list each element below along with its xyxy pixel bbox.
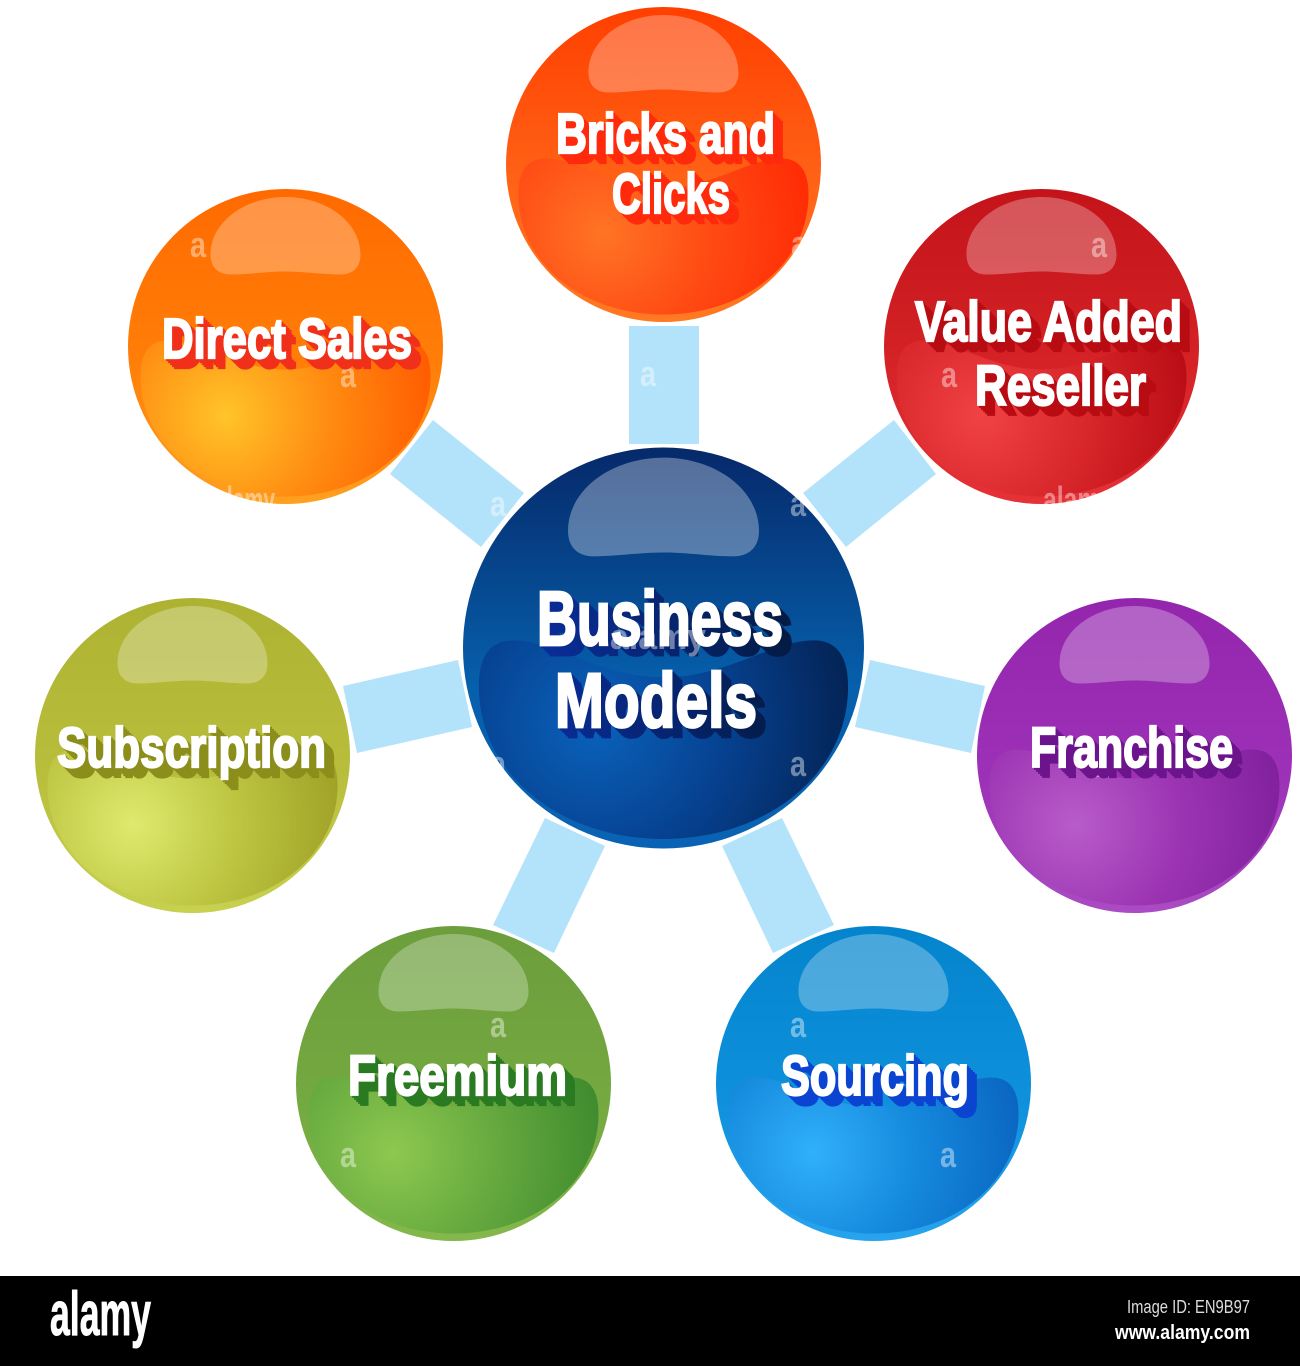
bubble: Freemium: Freemium [348, 1044, 567, 1108]
bubble: Franchise [974, 595, 1295, 916]
central bubble: Business Models: Business [537, 576, 783, 662]
bubble: Direct Sales: Direct Sales [162, 307, 412, 371]
bubble: Direct Sales: alamy [215, 479, 275, 520]
bubble: Freemium: a [490, 1004, 507, 1045]
bubble: Value Added Reseller: Value Added [915, 290, 1182, 354]
central bubble: Business Models: a [790, 483, 807, 524]
bubble: Value Added Reseller: Reseller [975, 354, 1146, 418]
watermark on connectors: a [640, 353, 657, 394]
bubble: Sourcing: Sourcing [781, 1044, 969, 1108]
bubble: Direct Sales: a [340, 354, 357, 395]
connector: right [855, 660, 985, 753]
bubble: Subscription: Subscription [57, 716, 326, 780]
bubble: Value Added Reseller: Value Added [915, 290, 1182, 354]
connectors [343, 326, 985, 953]
bubble: Franchise: a [1091, 744, 1108, 785]
bubble: Bricks and Clicks: a [791, 223, 808, 264]
connector: lower right [722, 818, 834, 953]
connector: lower left [493, 818, 605, 953]
bubble: Freemium: a [340, 1134, 357, 1175]
footer website: www.alamy.com [1114, 1322, 1250, 1344]
bubble: Direct Sales [125, 186, 446, 520]
bubble: Franchise: Franchise [1030, 716, 1233, 780]
bubble: Bricks and Clicks: Bricks and [556, 102, 775, 166]
watermark on connectors [490, 353, 657, 524]
footer bar [0, 1276, 1300, 1366]
bubble: Sourcing: a [940, 1134, 957, 1175]
connector: upper right [803, 420, 936, 547]
central bubble: Business Models: Models [555, 658, 757, 744]
footer logo: alamy: alamy [50, 1280, 151, 1349]
bubble: Sourcing: a [790, 1004, 807, 1045]
bubble: Value Added Reseller [881, 186, 1202, 520]
central bubble: Business Models: a [790, 743, 807, 784]
bubble: Value Added Reseller: a [1091, 224, 1108, 265]
central bubble: Business Models: Models [555, 658, 757, 744]
bubble: Subscription [32, 595, 353, 916]
central bubble: Business Models: alamy [610, 616, 706, 657]
bubble: Bricks and Clicks: Clicks [612, 162, 730, 226]
bubble: Bricks and Clicks: Bricks and [556, 102, 775, 166]
connector: left [343, 660, 472, 753]
bubble: Bricks and Clicks [503, 4, 824, 325]
bubble: Franchise: Franchise [1030, 716, 1233, 780]
connector: top [629, 326, 699, 444]
bubble: Value Added Reseller: Reseller [975, 354, 1146, 418]
central bubble: Business Models: a [490, 743, 507, 784]
bubble: Freemium [293, 923, 614, 1244]
bubble: Direct Sales: Direct Sales [162, 307, 412, 371]
bubble: Freemium: Freemium [348, 1044, 567, 1108]
central bubble: Business Models [460, 444, 867, 852]
bubble: Value Added Reseller: alamy [1043, 479, 1113, 520]
connector: upper left [390, 420, 524, 547]
central bubble: Business Models: Business [537, 576, 783, 662]
bubble: Sourcing [713, 923, 1034, 1244]
watermark on connectors: a [490, 483, 507, 524]
bubble: Subscription: Subscription [57, 716, 326, 780]
bubble: Bricks and Clicks: Clicks [612, 162, 730, 226]
bubble: Sourcing: Sourcing [781, 1044, 969, 1108]
footer image id: Image ID: EN9B97 [1127, 1297, 1250, 1317]
bubble: Value Added Reseller: a [941, 354, 958, 395]
bubble: Direct Sales: a [190, 224, 207, 265]
